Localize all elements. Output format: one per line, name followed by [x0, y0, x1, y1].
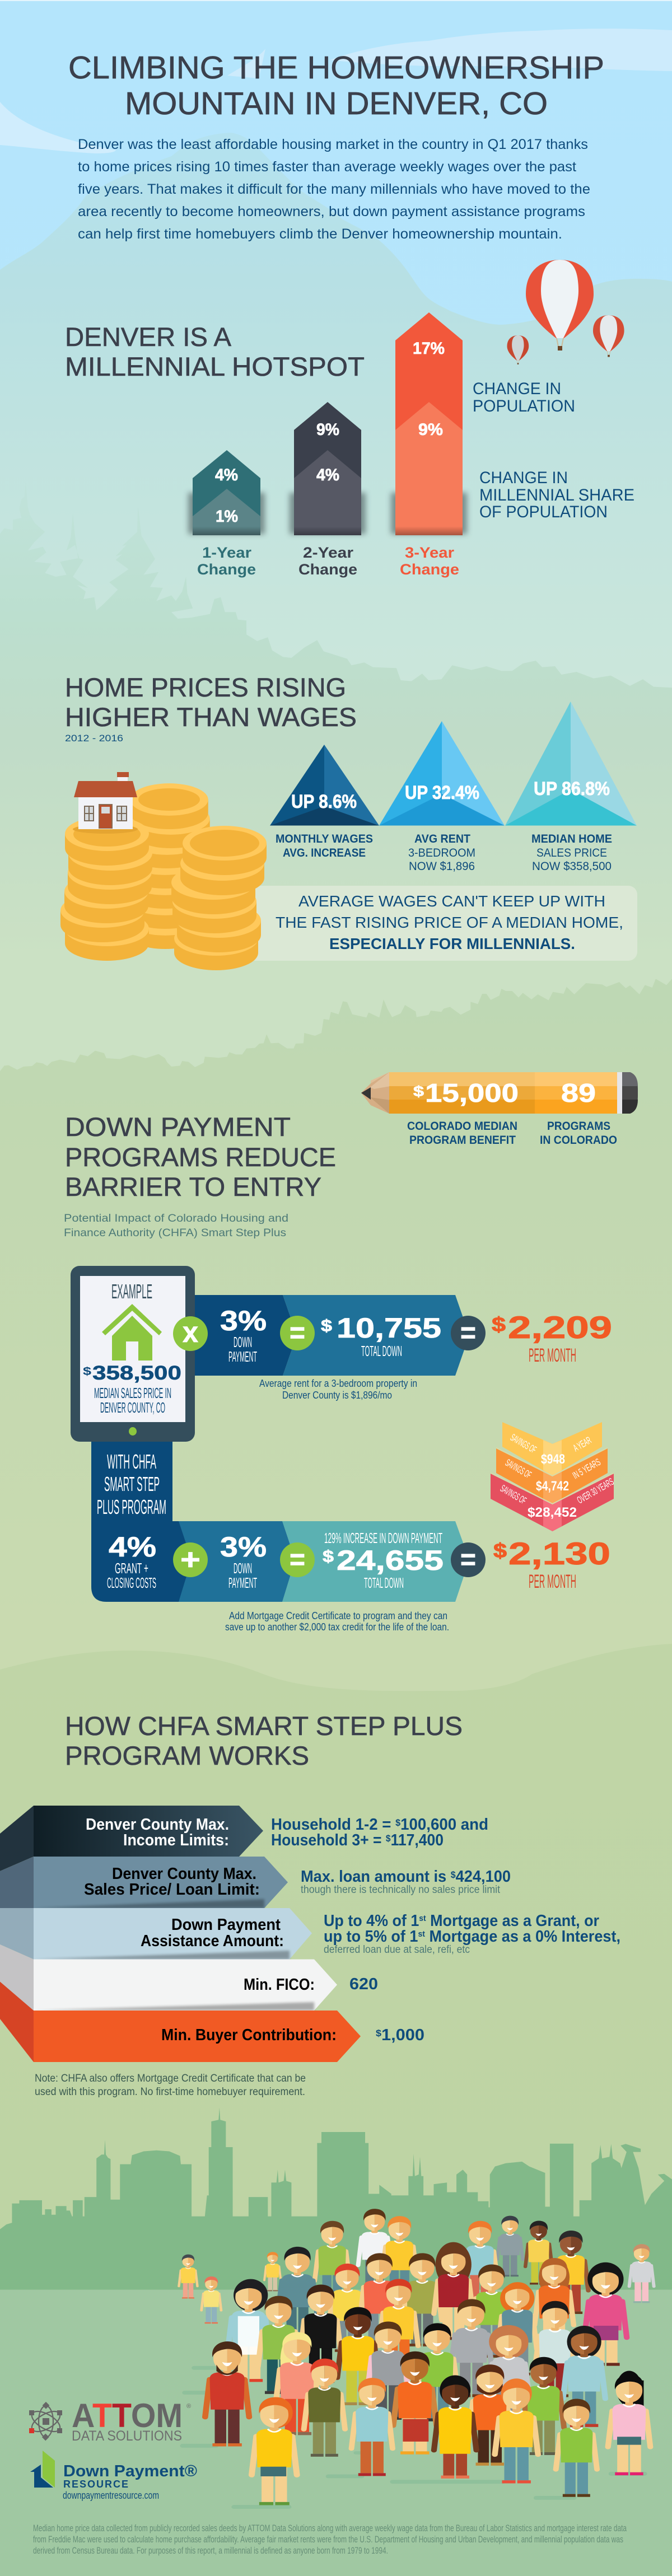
pencil: program stats: 89 [561, 1078, 596, 1107]
triangle: monthly wages [270, 745, 379, 825]
icon: ATTOM atom mark [29, 2402, 63, 2441]
triangle captions: 3-BEDROOM [408, 847, 475, 859]
requirement values: Household 3+ = [271, 1831, 392, 1849]
requirement values: $ [376, 2028, 382, 2039]
heading: down payment programs: PROGRAMS REDUCE [65, 1142, 336, 1172]
diagram: example without program: = [290, 1317, 305, 1349]
logo: Down Payment Resource: RESOURCE [63, 2479, 130, 2490]
logo: ATTOM: ® [186, 2403, 191, 2410]
banner: min buyer contribution: Min. Buyer Contribution: [161, 2026, 337, 2044]
diagram: example without program: $ [321, 1317, 332, 1335]
footnote: sources [33, 2523, 627, 2556]
logo: ATTOM [29, 2397, 191, 2444]
triangle captions: AVG RENT [414, 833, 470, 845]
pencil captions: PROGRAMS [547, 1120, 610, 1133]
chevron: savings of 4,742 [491, 1448, 614, 1504]
arrow: 3-year change: 9% [418, 420, 443, 439]
diagram: with CHFA program: $ [323, 1548, 334, 1566]
requirement values: Mortgage as a 0% Interest, [425, 1928, 620, 1946]
banner: income limits [0, 1806, 263, 1871]
tablet: example price: DENVER COUNTY, CO [100, 1399, 165, 1416]
intro paragraph: to home prices rising 10 times faster than average weekly wages over the past [78, 159, 576, 175]
icon: coin stacks and house [60, 772, 267, 970]
note: mortgage credit certificate: Add Mortgage Credit Certificate to program and they can [229, 1610, 447, 1621]
tablet: example price: 358,500 [92, 1362, 181, 1384]
diagram: with CHFA program: WITH CHFA [107, 1450, 156, 1473]
requirement values: $ [386, 1833, 391, 1844]
chevron: savings of 4,742: IN 5 YEARS [571, 1456, 603, 1481]
logo: Down Payment Resource: Down Payment® [63, 2462, 197, 2480]
diagram: with CHFA program: GRANT + [115, 1560, 148, 1577]
chevron: savings of 948: SAVINGS OF [508, 1432, 538, 1455]
diagram: example without program [71, 1266, 486, 1442]
heading: how CHFA works [65, 1711, 463, 1770]
arrow: 1-year change [193, 450, 260, 535]
chart: population change arrows [188, 312, 467, 535]
arrow labels: year change: 1-Year [202, 544, 252, 561]
note: mortgage credit certificate: save up to another $2,000 tax credit for the life of the loan. [225, 1621, 449, 1633]
triangle captions: NOW $1,896 [409, 860, 475, 873]
pencil captions: PROGRAM BENEFIT [409, 1134, 516, 1147]
diagram: example without program: TOTAL DOWN [361, 1343, 402, 1359]
legend: change in millennial share: MILLENNIAL SHARE [479, 486, 634, 504]
diagram: with CHFA program: DOWN [234, 1560, 252, 1577]
icon: house [73, 772, 138, 834]
triangle: median home: UP 86.8% [534, 778, 610, 800]
heading: Denver is a millennial hotspot: MILLENNIAL HOTSPOT [65, 352, 365, 381]
heading: down payment programs: BARRIER TO ENTRY [65, 1172, 321, 1201]
arrow labels: year change [197, 544, 459, 578]
requirement values: 620 [349, 1975, 378, 1993]
tablet: example price: MEDIAN SALES PRICE IN [94, 1385, 171, 1401]
left coin stack [60, 816, 152, 961]
diagram: example without program: DOWN [234, 1334, 252, 1350]
triangle: avg rent: UP 32.4% [405, 782, 479, 803]
heading: home prices rising: HOME PRICES RISING [65, 672, 346, 702]
result: 2,130 per month: 2,130 [508, 1536, 610, 1571]
legend: change in millennial share [479, 469, 634, 521]
requirement values: up to 5% of 1 [324, 1928, 424, 1946]
diagram: example without program: = [460, 1317, 476, 1349]
diagram: with CHFA program: TOTAL DOWN [364, 1574, 404, 1591]
intro paragraph: five years. That makes it difficult for the many millennials who have moved to the [78, 181, 590, 197]
chevron: savings of 948: $948 [541, 1452, 565, 1467]
requirement values: Mortgage as a Grant, or [426, 1912, 599, 1930]
banner: loan limit: Denver County Max. [112, 1865, 256, 1883]
banner: assistance amount: Down Payment [171, 1916, 281, 1934]
note: CHFA [35, 2073, 306, 2098]
diagram: with CHFA program: 129% INCREASE IN DOWN PAYMENT [324, 1530, 442, 1546]
chevron: savings of 948: A YEAR [571, 1434, 593, 1453]
tablet: example price: EXAMPLE [111, 1280, 152, 1303]
diagram: with CHFA program: PLUS PROGRAM [97, 1495, 166, 1518]
requirement values: Up to 4% of 1 [324, 1912, 427, 1930]
title: MOUNTAIN IN DENVER, CO [125, 86, 548, 121]
requirement values: $ [451, 1869, 456, 1880]
note: average rent [259, 1378, 417, 1401]
requirement values: st [419, 1914, 426, 1923]
result: 2,209 per month: $ [492, 1313, 506, 1336]
chevron: savings of 4,742: $4,742 [536, 1479, 569, 1494]
pencil: program stats: 15,000 [425, 1078, 519, 1107]
subheading: CHFA smart step plus: Finance Authority (CHFA) Smart Step Plus [64, 1227, 286, 1239]
diagram: example without program: 3% [220, 1305, 267, 1336]
logo: ATTOM: ATTOM [72, 2397, 183, 2434]
banner: loan limit: Sales Price/ Loan Limit: [84, 1881, 260, 1899]
intro paragraph: area recently to become homeowners, but down payment assistance programs [78, 204, 585, 219]
arrow: 3-year change: 17% [413, 339, 445, 358]
chevron: savings of 28,452 [491, 1473, 615, 1531]
note: CHFA: used with this program. No first-time homebuyer requirement. [35, 2086, 305, 2098]
pencil captions: COLORADO MEDIAN [407, 1120, 517, 1133]
diagram: with CHFA program [91, 1439, 486, 1602]
arrow labels: year change: Change [298, 561, 357, 578]
triangle captions: AVG. INCREASE [283, 847, 366, 859]
callout: wages can't keep up [246, 886, 637, 961]
arrow: 2-year change: 9% [316, 420, 339, 439]
callout: wages can't keep up: AVERAGE WAGES CAN'T KEEP UP WITH [298, 892, 605, 910]
diagram: with CHFA program: SMART STEP [104, 1472, 160, 1495]
tablet: example price: $ [83, 1366, 91, 1378]
triangle captions: MEDIAN HOME [531, 833, 612, 845]
stair banners: program requirements [0, 1806, 361, 2062]
result: 2,130 per month [493, 1536, 610, 1592]
banner: assistance amount: Assistance Amount: [141, 1932, 284, 1950]
pencil captions [407, 1120, 617, 1147]
triangle captions: SALES PRICE [536, 847, 607, 859]
legend: change in population: CHANGE IN [473, 380, 561, 398]
arrow labels: year change: 2-Year [303, 544, 354, 561]
legend: change in population: POPULATION [473, 397, 575, 415]
result: 2,130 per month: $ [493, 1539, 507, 1562]
banner: min FICO: Min. FICO: [244, 1976, 315, 1994]
result: 2,209 per month: PER MONTH [529, 1345, 576, 1366]
triangle captions: MONTHLY WAGES [276, 833, 373, 845]
requirement sub-notes: though there is technically no sales price limit [301, 1884, 501, 1896]
diagram: with CHFA program: PAYMENT [228, 1574, 257, 1591]
requirement values: $ [395, 1817, 401, 1828]
icon: house arrow [30, 2451, 55, 2488]
heading: Denver is a millennial hotspot: DENVER IS A [65, 322, 232, 352]
diagram: with CHFA program: 4% [109, 1531, 156, 1563]
chart: mountain triangles [270, 702, 637, 825]
logo: Down Payment Resource [30, 2451, 197, 2501]
heading: Denver is a millennial hotspot [65, 322, 365, 381]
diagram: with CHFA program: 3% [220, 1531, 267, 1563]
icon: hot air balloons [507, 260, 624, 364]
heading: how CHFA works: PROGRAM WORKS [65, 1741, 309, 1770]
footnote: sources: derived from Census Bureau data. For purposes of this report, a millennial is defined as anyone born from 1979 to 1994. [33, 2545, 388, 2556]
banner: income limits: Income Limits: [123, 1831, 229, 1849]
date range: 2012 - 2016 [65, 733, 123, 744]
requirement values: Max. loan amount is [301, 1868, 456, 1886]
callout: wages can't keep up: THE FAST RISING PRICE OF A MEDIAN HOME, [276, 914, 623, 931]
skyline and ground [0, 2107, 672, 2576]
chevron: savings of 948 [496, 1422, 608, 1476]
diagram: example without program: x [183, 1316, 198, 1349]
requirement values: Household 1-2 = [271, 1816, 397, 1834]
note: mortgage credit certificate [225, 1610, 449, 1633]
diagram: with CHFA program: CLOSING COSTS [107, 1574, 156, 1591]
arrow: 3-year change [395, 312, 463, 535]
chevron: savings of 28,452: OVER 30 YEARS [575, 1476, 615, 1506]
requirement values [271, 1816, 620, 2044]
triangle captions [276, 833, 612, 873]
diagram: with CHFA program: 24,655 [337, 1545, 444, 1576]
requirement sub-notes: deferred loan due at sale, refi, etc [324, 1944, 470, 1956]
intro paragraph: Denver was the least affordable housing market in the country in Q1 2017 thanks [78, 137, 588, 152]
diagram: with CHFA program: + [180, 1544, 200, 1576]
requirement values: 100,600 and [400, 1816, 488, 1834]
callout: wages can't keep up: ESPECIALLY FOR MILLENNIALS. [329, 935, 575, 952]
heading: home prices rising: HIGHER THAN WAGES [65, 702, 357, 732]
chevron: savings of 28,452: SAVINGS OF [498, 1483, 528, 1506]
heading: down payment programs [65, 1112, 336, 1201]
children at the edges [179, 2244, 654, 2323]
note: average rent: Average rent for a 3-bedroom property in [259, 1378, 417, 1389]
requirement values: 424,100 [456, 1868, 511, 1886]
intro paragraph: can help first time homebuyers climb the Denver homeownership mountain. [78, 226, 562, 242]
arrow labels: year change: 3-Year [405, 544, 455, 561]
arrow: 2-year change [294, 402, 361, 535]
triangle: monthly wages: UP 8.6% [291, 791, 357, 812]
diagram: with CHFA program: = [290, 1544, 305, 1576]
arrow labels: year change: Change [197, 561, 256, 578]
logo: ATTOM: DATA SOLUTIONS [72, 2428, 182, 2444]
result: 2,130 per month: PER MONTH [529, 1571, 576, 1592]
subheading: CHFA smart step plus: Potential Impact of Colorado Housing and [64, 1213, 288, 1224]
pencil: program stats [361, 1072, 638, 1114]
banner: loan limit [0, 1857, 288, 1908]
requirement values: 1,000 [381, 2026, 424, 2044]
arrow: 2-year change: 4% [316, 466, 339, 484]
arrow labels: year change: Change [400, 561, 459, 578]
title: CLIMBING THE HOMEOWNERSHIP [68, 50, 604, 86]
crowd of people [179, 2209, 654, 2505]
diagram: with CHFA program: = [460, 1544, 476, 1576]
chevron: savings of 28,452: $28,452 [528, 1505, 577, 1520]
triangle: median home [505, 702, 637, 825]
logo: Down Payment Resource: downpaymentresource.com [63, 2490, 159, 2501]
heading: how CHFA works: HOW CHFA SMART STEP PLUS [65, 1711, 463, 1741]
result: 2,209 per month: 2,209 [508, 1310, 612, 1345]
banner: min FICO [0, 1944, 337, 2011]
triangle captions: NOW $358,500 [532, 860, 612, 873]
legend: change in millennial share: CHANGE IN [479, 469, 568, 487]
result: 2,209 per month [492, 1310, 612, 1366]
right coin stack [171, 826, 267, 970]
requirement values: 117,400 [391, 1831, 444, 1849]
banner: income limits: Denver County Max. [86, 1816, 229, 1834]
triangle: avg rent [379, 721, 505, 825]
tablet: example price [71, 1266, 195, 1442]
heading: home prices rising [65, 672, 357, 732]
arrow: 1-year change: 4% [215, 466, 238, 484]
note: CHFA: Note: CHFA also offers Mortgage Credit Certificate that can be [35, 2073, 306, 2084]
legend: change in millennial share: OF POPULATION [479, 503, 608, 521]
subheading: CHFA smart step plus [64, 1213, 288, 1239]
pencil: program stats: $ [413, 1083, 424, 1100]
heading: down payment programs: DOWN PAYMENT [65, 1112, 291, 1142]
chevron: savings of 4,742: SAVINGS OF [503, 1457, 533, 1480]
chevrons: savings [491, 1422, 615, 1531]
intro paragraph [78, 137, 590, 242]
requirement sub-notes [301, 1884, 501, 1956]
requirement values: st [418, 1929, 425, 1939]
middle coin stack [126, 783, 210, 949]
pencil captions: IN COLORADO [540, 1134, 617, 1147]
banner: assistance amount [0, 1908, 312, 1960]
title [68, 50, 604, 121]
arrow: 1-year change: 1% [216, 507, 238, 526]
note: average rent: Denver County is $1,896/mo [282, 1390, 392, 1401]
banner: min buyer contribution [0, 1982, 361, 2062]
legend: change in population [473, 380, 575, 415]
diagram: example without program: 10,755 [337, 1312, 441, 1344]
diagram: example without program: PAYMENT [228, 1348, 257, 1365]
